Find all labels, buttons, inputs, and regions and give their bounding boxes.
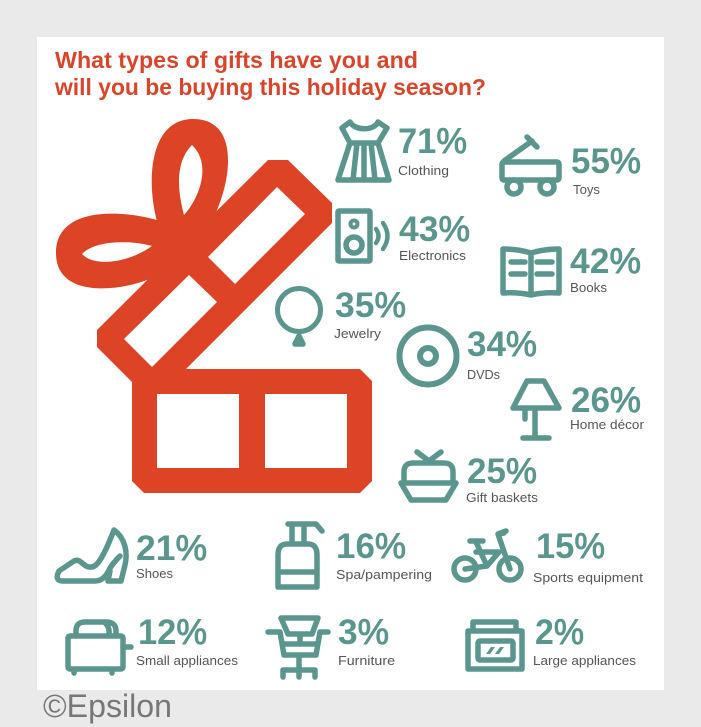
item: electronics: 43% [399,210,470,249]
icon: open gift box [56,119,372,493]
icon: ring [278,288,320,344]
icon: appliance [468,622,522,669]
item: toys [502,137,641,197]
item: large appliances: Large appliances [533,653,637,668]
icon: basket [401,452,456,500]
item: gift baskets: Gift baskets [466,490,539,505]
item: shoes: 21% [136,529,207,568]
icon: lamp [513,381,559,438]
item: home decor [513,381,645,438]
item: clothing [338,122,467,180]
item: large appliances: 2% [535,613,584,652]
item: clothing: Clothing [398,163,449,178]
item: electronics: Electronics [399,248,467,263]
item: small appliances: 12% [138,613,207,652]
item: home decor: Home décor [570,417,645,432]
item: small appliances [68,613,239,673]
item: dvds [400,325,537,384]
item: gift baskets [401,452,539,505]
item: dvds: DVDs [467,367,500,382]
item: jewelry: Jewelry [334,326,382,341]
item: books: Books [570,280,608,295]
title [54,47,486,100]
item: books [503,242,641,295]
item: furniture: Furniture [338,653,395,668]
item: furniture [268,613,395,677]
item: books: 42% [570,242,641,281]
icon: high heel [57,530,126,581]
item: shoes: Shoes [136,566,173,581]
icon: bicycle [454,531,521,580]
item: shoes [57,529,207,581]
title: will you be buying this holiday season? [54,74,486,100]
title: What types of gifts have you and [55,47,418,73]
item: home decor: 26% [571,381,641,420]
item: sports equipment [454,527,643,585]
item: large appliances [468,613,637,669]
item: spa [278,524,432,587]
icon: disc [400,328,456,384]
icon: speaker [338,211,388,261]
icon: wagon [502,137,559,194]
item: spa: Spa/pampering [336,567,432,582]
icon: pump bottle [278,524,322,587]
item: electronics [338,210,470,263]
icon: dress [338,122,389,180]
item: furniture: 3% [338,613,389,652]
item: gift baskets: 25% [467,452,537,491]
item: sports equipment: Sports equipment [533,570,643,585]
item: dvds: 34% [467,325,537,364]
item: small appliances: Small appliances [136,653,239,668]
icon: toaster [68,622,131,673]
icon: open book [503,249,559,295]
item: toys: 55% [571,142,641,181]
item: spa: 16% [336,527,406,566]
item: toys: Toys [573,182,601,197]
credit: Epsilon: ©Epsilon [43,688,172,724]
item: jewelry: 35% [335,286,406,325]
item: sports equipment: 15% [536,527,605,566]
icon: office chair [268,618,328,677]
item: jewelry [278,286,406,344]
item: clothing: 71% [398,122,467,161]
